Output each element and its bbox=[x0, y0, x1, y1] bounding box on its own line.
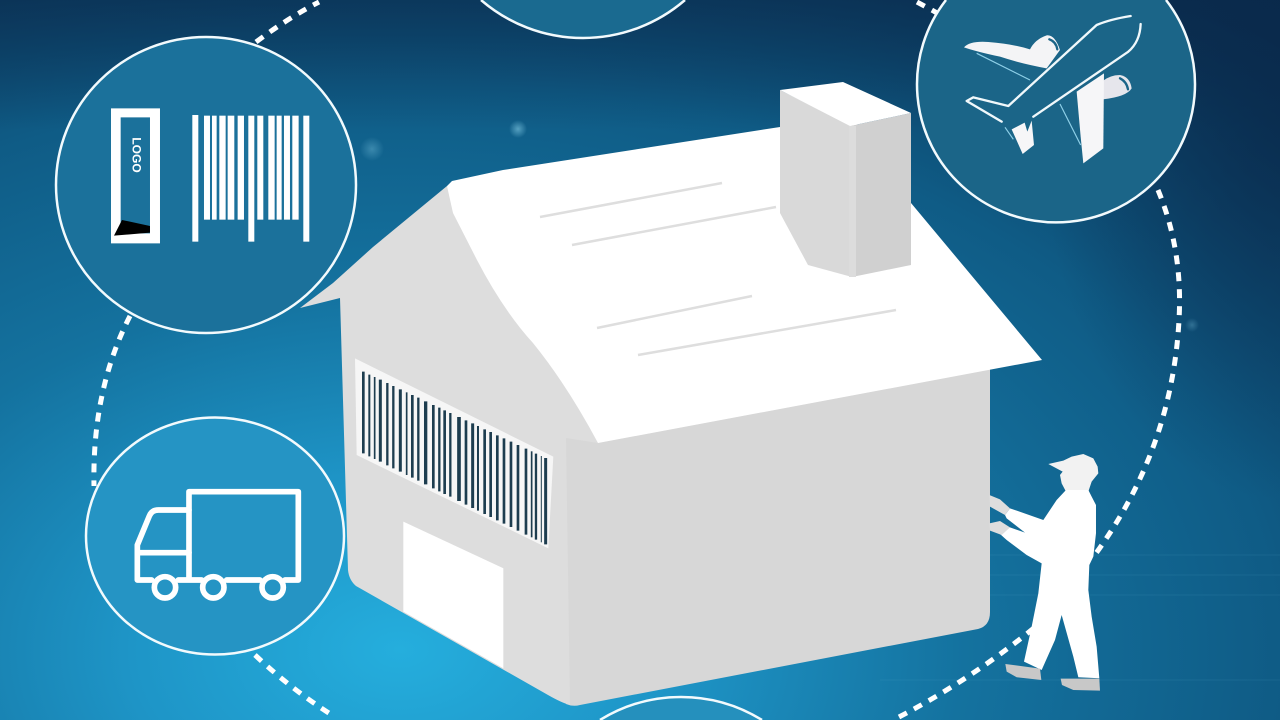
circle: airplane bbox=[917, 0, 1195, 222]
chimney bbox=[780, 82, 911, 277]
circle: label and barcode bbox=[56, 37, 356, 333]
left wall with gable overhang bbox=[300, 186, 600, 705]
circle: top (cropped) bbox=[481, 0, 685, 38]
circle: bottom (cropped) bbox=[600, 697, 762, 720]
loading door bbox=[403, 522, 503, 668]
roof bbox=[447, 115, 1042, 443]
warehouse worker bbox=[989, 454, 1100, 691]
roof lines bbox=[540, 183, 896, 355]
right wall bbox=[560, 360, 990, 706]
worker head and cap bbox=[1048, 454, 1098, 492]
icon: airplane bbox=[964, 16, 1141, 163]
icon: delivery truck bbox=[137, 492, 298, 598]
icon: shipping label bbox=[111, 108, 160, 243]
logo text on label: LOGO bbox=[130, 137, 144, 173]
warehouse building bbox=[300, 82, 1042, 706]
worker shoes bbox=[1005, 664, 1041, 680]
worker body bbox=[1000, 490, 1099, 678]
icon: barcode bbox=[192, 115, 309, 242]
worker hands bbox=[989, 495, 1010, 535]
background particles bbox=[360, 120, 1199, 332]
circle: delivery truck bbox=[86, 418, 344, 654]
barcode window on wall bbox=[355, 358, 553, 668]
